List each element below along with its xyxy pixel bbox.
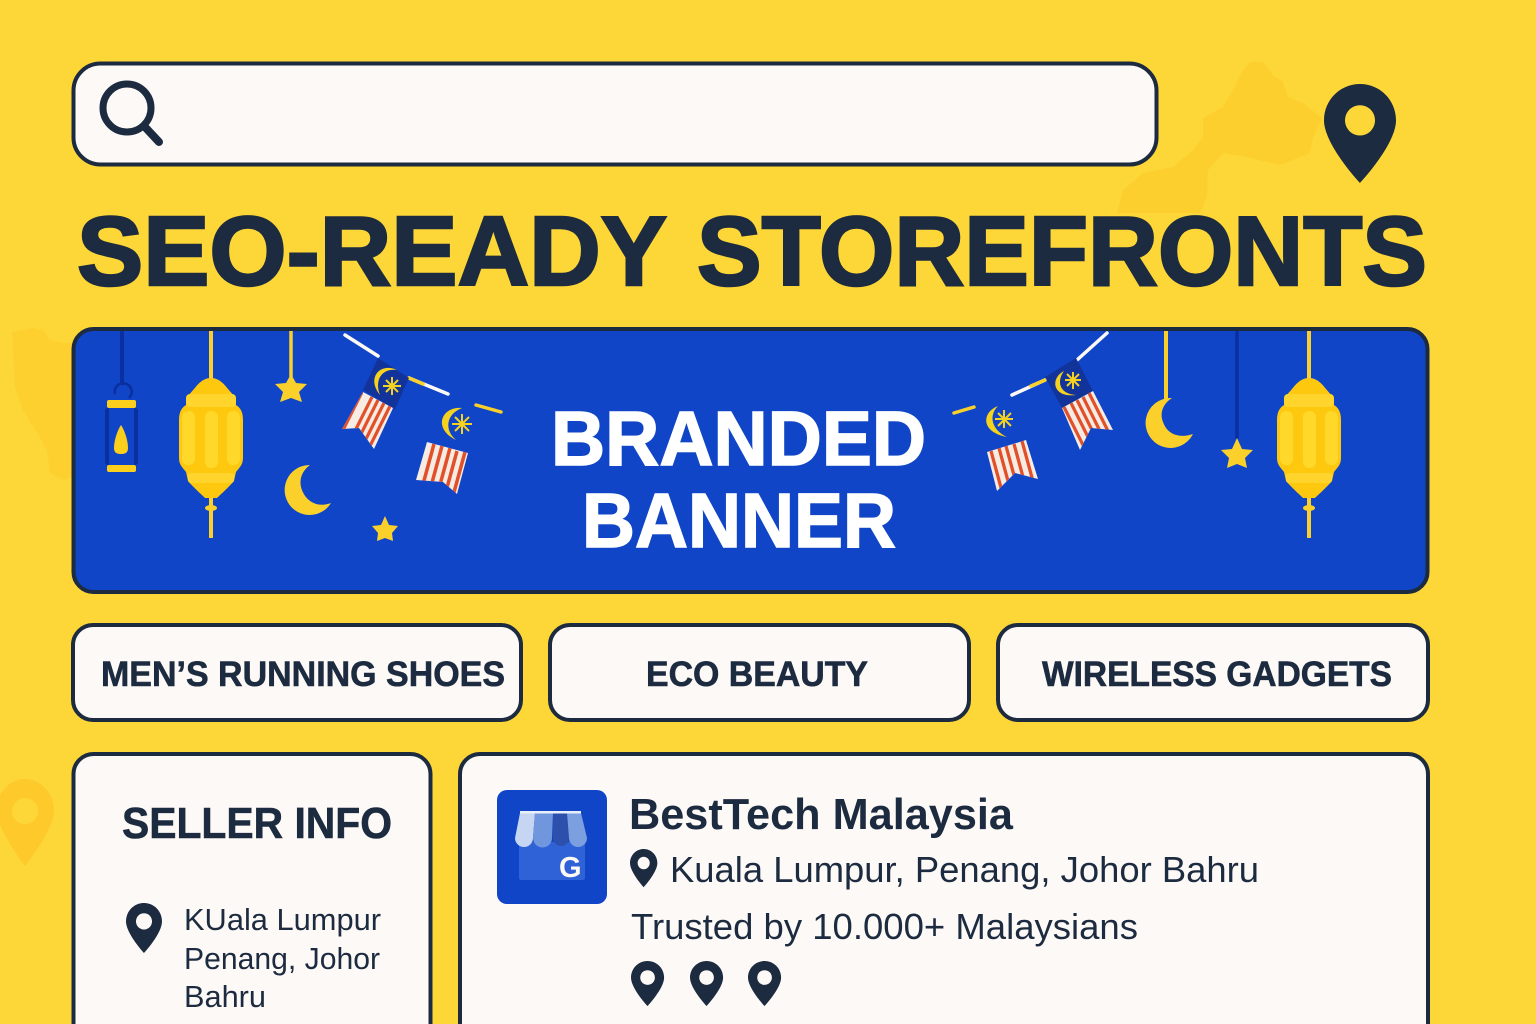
seller locations: Penang, Johor	[184, 941, 380, 976]
banner heading: BRANDED	[551, 396, 926, 482]
icon: hanging crescent moon right	[1146, 331, 1193, 448]
icon: flag three	[1045, 358, 1113, 455]
category chip: wireless gadgets: WIRELESS GADGETS	[1042, 655, 1392, 694]
icon: crescent moon left	[285, 465, 331, 515]
icon: location pin	[1324, 84, 1396, 183]
background map silhouette: left	[12, 328, 72, 480]
banner heading: BANNER	[582, 478, 896, 564]
icon row: rating pins	[631, 961, 781, 1006]
icon: google storefront: G	[559, 852, 582, 884]
category chip: wireless gadgets	[998, 625, 1428, 720]
title	[77, 196, 1427, 306]
bunting strings left	[345, 335, 501, 412]
background map silhouette: top right	[1117, 62, 1322, 213]
panel: seller info	[74, 754, 430, 1024]
icon: hanging star left	[275, 331, 307, 402]
category chip: men's running shoes: MEN’S RUNNING SHOES	[101, 655, 505, 694]
category chip: men's running shoes	[73, 625, 521, 720]
icon: large lantern right	[1277, 331, 1341, 538]
category chip: eco beauty: ECO BEAUTY	[646, 655, 868, 694]
icon: google storefront	[497, 790, 607, 904]
business locations: Kuala Lumpur, Penang, Johor Bahru	[670, 849, 1259, 890]
seller locations	[184, 902, 381, 1014]
business name: BestTech Malaysia	[629, 790, 1014, 839]
category chip: eco beauty	[550, 625, 969, 720]
banner heading	[551, 396, 926, 564]
icon: flag four	[986, 406, 1038, 495]
icon: flag two	[416, 408, 472, 496]
panel: business profile	[460, 754, 1428, 1024]
panel: branded banner	[74, 329, 1428, 592]
background pin	[0, 779, 54, 866]
icon: seller location pin	[126, 903, 162, 953]
seller info heading: SELLER INFO	[122, 799, 392, 848]
title: STOREFRONTS	[697, 196, 1427, 306]
seller locations: Bahru	[184, 979, 266, 1014]
search bar	[74, 64, 1156, 164]
icon: magnifying glass	[103, 84, 159, 142]
icon: small lantern left	[105, 331, 138, 472]
trust line: Trusted by 10.000+ Malaysians	[631, 906, 1138, 947]
title: SEO-READY	[77, 196, 667, 306]
bunting strings right	[954, 333, 1107, 413]
icon: business location pin	[630, 849, 657, 887]
seller locations: KUala Lumpur	[184, 902, 381, 937]
icon: large lantern left	[179, 331, 243, 538]
icon: hanging star right	[1221, 331, 1253, 468]
icon: star	[372, 516, 398, 541]
icon: flag one	[342, 358, 409, 449]
